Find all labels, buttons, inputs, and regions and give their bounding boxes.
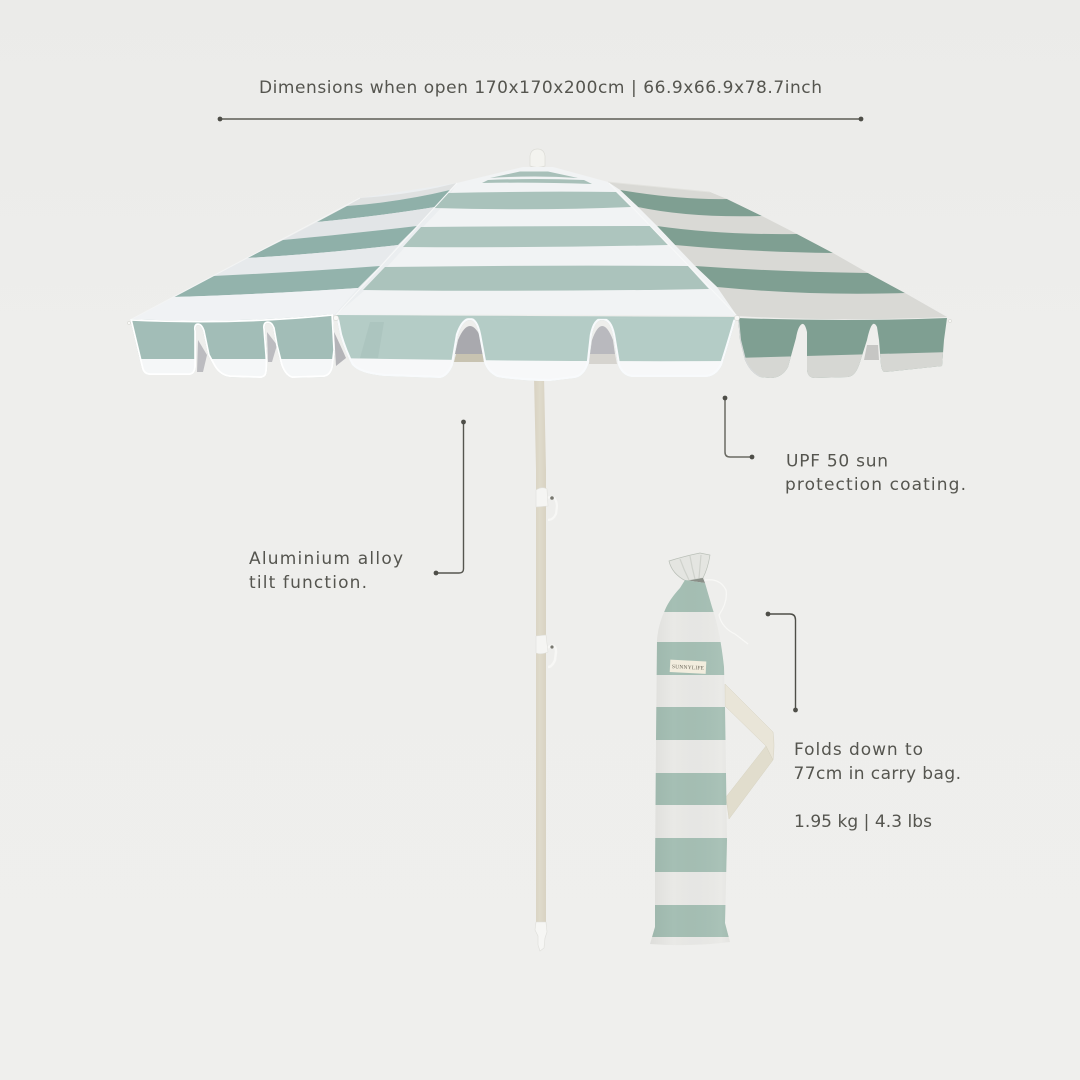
callout: tilt text: Aluminium alloy [249,549,403,569]
callout: UPF text: protection coating. [785,475,966,495]
canopy underside showing through scallops [197,326,879,372]
pole [534,376,547,951]
callout: tilt text: tilt function. [249,573,367,593]
bag brand label: SUNNYLIFE [672,664,705,672]
tilt joint: lower clip [536,635,556,667]
callout: bag leader line [766,612,798,712]
canopy centre valance with scallops [336,315,736,381]
canopy right valance with scallops [738,318,947,378]
canopy left panel [130,183,457,321]
bag brand label [670,660,706,674]
canopy centre panel [336,167,737,316]
callout: bag text [794,740,961,832]
bag drawstring [705,580,748,644]
callout: bag text: 1.95 kg | 4.3 lbs [794,812,932,832]
bag top frill [669,553,710,584]
carry bag [645,553,774,950]
pole ground spike [535,922,547,951]
canopy left valance with scallops [130,314,335,378]
rib tip caps [127,315,952,325]
bag strap [725,684,774,819]
heading: open dimensions: Dimensions when open 170x170x200cm | 66.9x66.9x78.7inch [259,78,822,98]
canopy finial [530,149,545,168]
callout: tilt text [249,549,403,593]
canopy right panel [610,182,946,320]
dimension line: canopy width [218,117,863,121]
umbrella canopy [125,149,955,385]
callout: tilt leader line [434,420,466,575]
callout: bag text: Folds down to [794,740,923,760]
tilt joint: upper clip [536,488,557,520]
callout: bag text: 77cm in carry bag. [794,764,961,784]
bag body stripes [650,580,730,945]
callout: UPF text: UPF 50 sun [786,452,888,472]
callout: UPF text [785,452,966,495]
canopy rib seams [130,182,737,320]
callout: UPF leader line [723,396,754,459]
